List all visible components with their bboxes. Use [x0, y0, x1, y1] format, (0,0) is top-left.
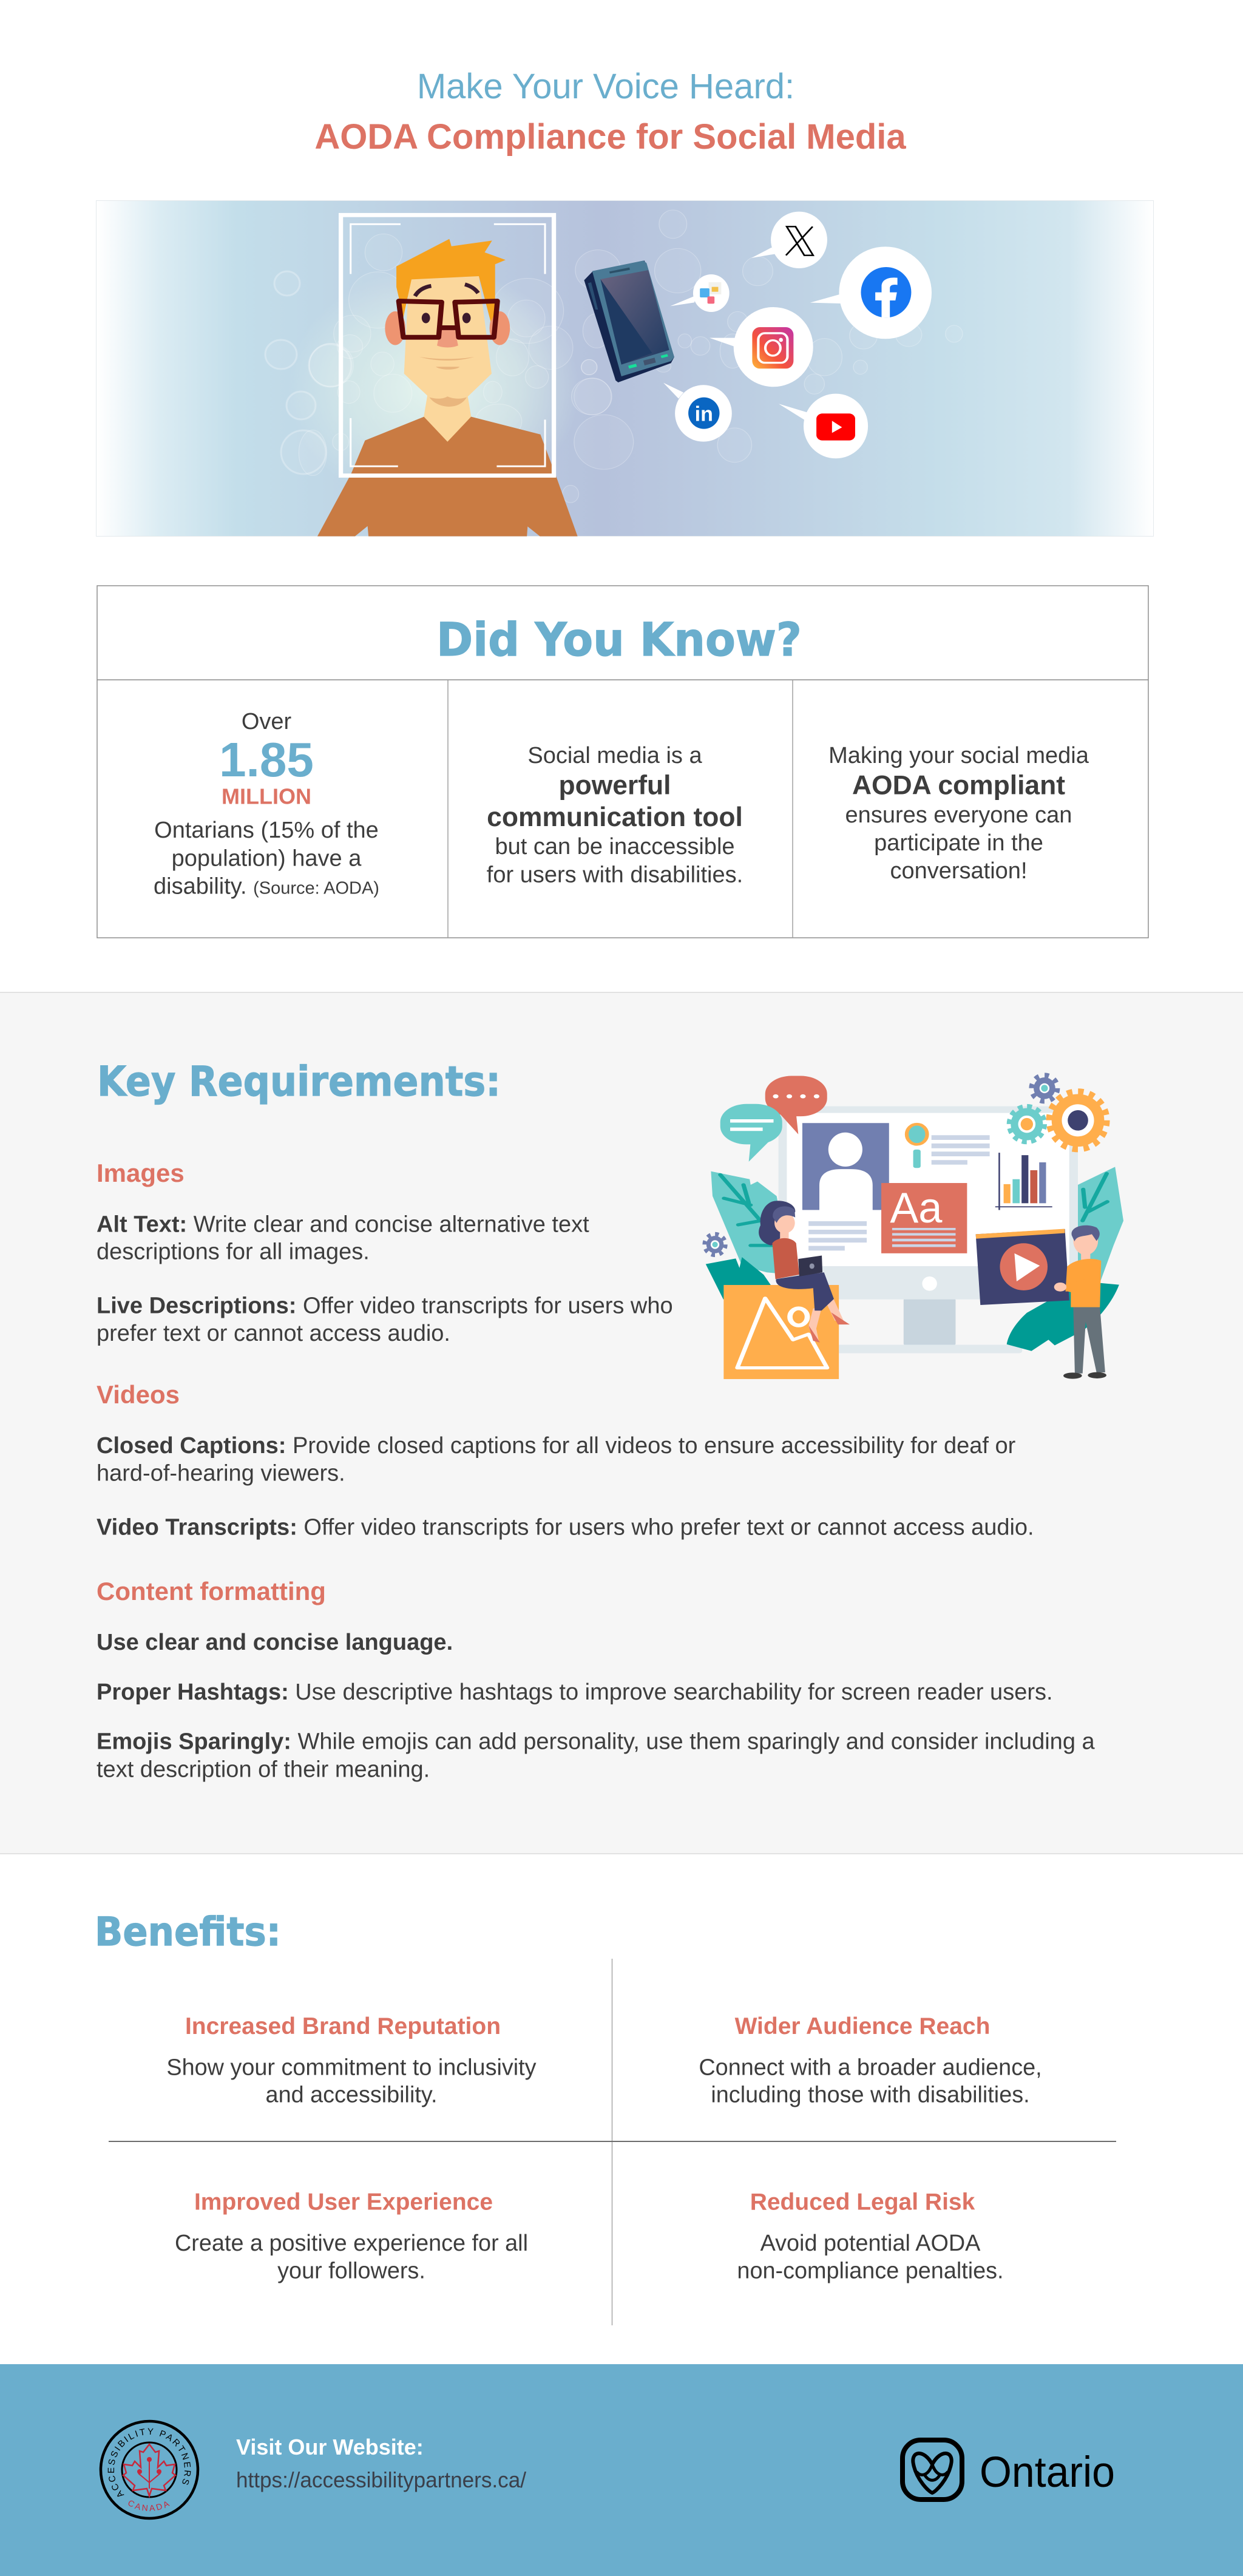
logo: accessibility partners [100, 2419, 199, 2520]
fact: communication tool: but can be inaccessible [495, 834, 735, 859]
icon: Facebook [810, 246, 932, 339]
subsection: images: Images [97, 1159, 185, 1187]
dark leaf right [1007, 1281, 1119, 1351]
video panel [976, 1229, 1069, 1305]
subsection: images: descriptions for all images. [97, 1239, 370, 1265]
website callout [236, 2435, 526, 2492]
footer [0, 2364, 1243, 2576]
subsection: content formatting: text description of their meaning. [97, 1757, 430, 1782]
benefit: audience reach: Connect with a broader audience, [699, 2055, 1042, 2081]
subsection: images: Live Descriptions: Offer video transcripts for users who [97, 1293, 673, 1318]
leaves [706, 1167, 1123, 1300]
subsection: videos: Closed Captions: Provide closed captions for all videos to ensure accessibility for deaf or [97, 1433, 1016, 1459]
benefit: audience reach: including those with disabilities. [711, 2082, 1030, 2107]
benefit: user experience: Create a positive experience for all [175, 2231, 528, 2256]
logo: accessibility partners: CANADA [129, 2501, 170, 2512]
stat: 1.85 million: MILLION [222, 784, 311, 808]
typography card [881, 1183, 967, 1253]
subsection: content formatting [97, 1577, 1096, 1782]
subsection: videos [97, 1380, 1034, 1541]
subsection: videos: hard-of-hearing viewers. [97, 1460, 345, 1486]
icon: social reactions [670, 274, 730, 312]
man with video [1054, 1225, 1106, 1379]
fact: AODA compliant: ensures everyone can [845, 802, 1072, 828]
logo: Ontario: Ontario [980, 2449, 1115, 2496]
subsection: content formatting: Emojis Sparingly: While emojis can add personality, use them sparingly and consider including a [97, 1729, 1096, 1754]
benefit: brand reputation: Increased Brand Reputation [185, 2013, 501, 2039]
benefit: brand reputation [166, 2013, 537, 2107]
typography card: Aa [890, 1184, 943, 1232]
benefit: audience reach: Wider Audience Reach [735, 2013, 990, 2039]
title [314, 67, 906, 157]
panel: key requirements [0, 992, 1243, 1854]
gears [705, 1075, 1106, 1255]
subsection: content formatting: Content formatting [97, 1577, 326, 1605]
stat: 1.85 million: disability. (Source: AODA) [154, 874, 379, 900]
fact: AODA compliant: AODA compliant [852, 771, 1065, 800]
fact: communication tool [487, 743, 743, 887]
benefit: brand reputation: Show your commitment to inclusivity [166, 2055, 537, 2081]
stat: 1.85 million: population) have a [172, 846, 362, 872]
benefit: user experience: Improved User Experience [194, 2189, 493, 2215]
fact: AODA compliant: Making your social media [828, 743, 1089, 768]
website callout: Visit Our Website: [236, 2435, 424, 2459]
woman with laptop [759, 1201, 850, 1343]
benefit: legal risk [737, 2189, 1004, 2283]
panel: benefits [95, 1910, 1116, 2325]
fact: AODA compliant: conversation! [890, 858, 1028, 884]
stat: 1.85 million: 1.85 [219, 733, 314, 787]
profile card [802, 1123, 889, 1250]
stat: 1.85 million [154, 709, 379, 900]
illustration: accessible content team [705, 1075, 1123, 1379]
social media speech bubbles [663, 212, 932, 458]
monitor [779, 1106, 1078, 1354]
bokeh bubbles right [572, 210, 963, 469]
stat: 1.85 million: Over [242, 709, 292, 734]
icon: LinkedIn: in [695, 402, 713, 425]
heading: did you know: Did You Know? [436, 612, 802, 666]
benefit: user experience [175, 2189, 528, 2283]
man portrait [317, 215, 578, 537]
subsection: images [97, 1159, 673, 1346]
subsection: videos: Videos [97, 1380, 180, 1409]
speech bubbles [720, 1076, 827, 1162]
benefit: audience reach [699, 2013, 1042, 2107]
logo: Ontario [903, 2440, 1115, 2500]
panel: did you know [97, 586, 1148, 938]
icon: YouTube [779, 394, 868, 458]
fact: communication tool: communication tool [487, 802, 743, 832]
title line 1: Make Your Voice Heard: [417, 67, 794, 106]
bar chart [995, 1153, 1052, 1210]
fact: communication tool: for users with disabilities. [487, 862, 743, 887]
subsection: content formatting: Use clear and concise language. [97, 1630, 453, 1655]
subsection: videos: Video Transcripts: Offer video transcripts for users who prefer text or cannot access audio. [97, 1515, 1034, 1541]
icon: LinkedIn [663, 383, 732, 442]
heading: benefits: Benefits: [95, 1910, 281, 1955]
benefit: brand reputation: and accessibility. [266, 2082, 437, 2107]
orange image box [723, 1285, 839, 1379]
hero banner [96, 200, 1153, 537]
website callout: https://accessibilitypartners.ca/ [236, 2467, 526, 2492]
benefit: legal risk: Avoid potential AODA [760, 2231, 981, 2256]
fact: communication tool: Social media is a [527, 743, 702, 768]
title line 2: AODA Compliance for Social Media [314, 117, 906, 157]
heading: key requirements: Key Requirements: [97, 1058, 501, 1106]
magnifier and text lines [907, 1124, 990, 1168]
fact: AODA compliant [828, 743, 1089, 884]
benefit: legal risk: Reduced Legal Risk [750, 2189, 975, 2215]
subsection: images: prefer text or cannot access audio. [97, 1321, 450, 1346]
icon: Instagram [710, 307, 813, 387]
logo: accessibility partners: ACCESSIBILITY PARTNERS [108, 2428, 191, 2497]
icon: X [751, 212, 827, 268]
benefit: legal risk: non-compliance penalties. [737, 2258, 1004, 2283]
subsection: images: Alt Text: Write clear and concise alternative text [97, 1212, 589, 1237]
subsection: content formatting: Proper Hashtags: Use descriptive hashtags to improve searchability for screen reader users. [97, 1679, 1053, 1705]
phone [584, 260, 674, 382]
fact: AODA compliant: participate in the [874, 830, 1043, 856]
stat: 1.85 million: Ontarians (15% of the [154, 818, 379, 843]
benefit: user experience: your followers. [277, 2258, 425, 2283]
fact: communication tool: powerful [559, 771, 671, 800]
bokeh bubbles left [265, 234, 611, 503]
